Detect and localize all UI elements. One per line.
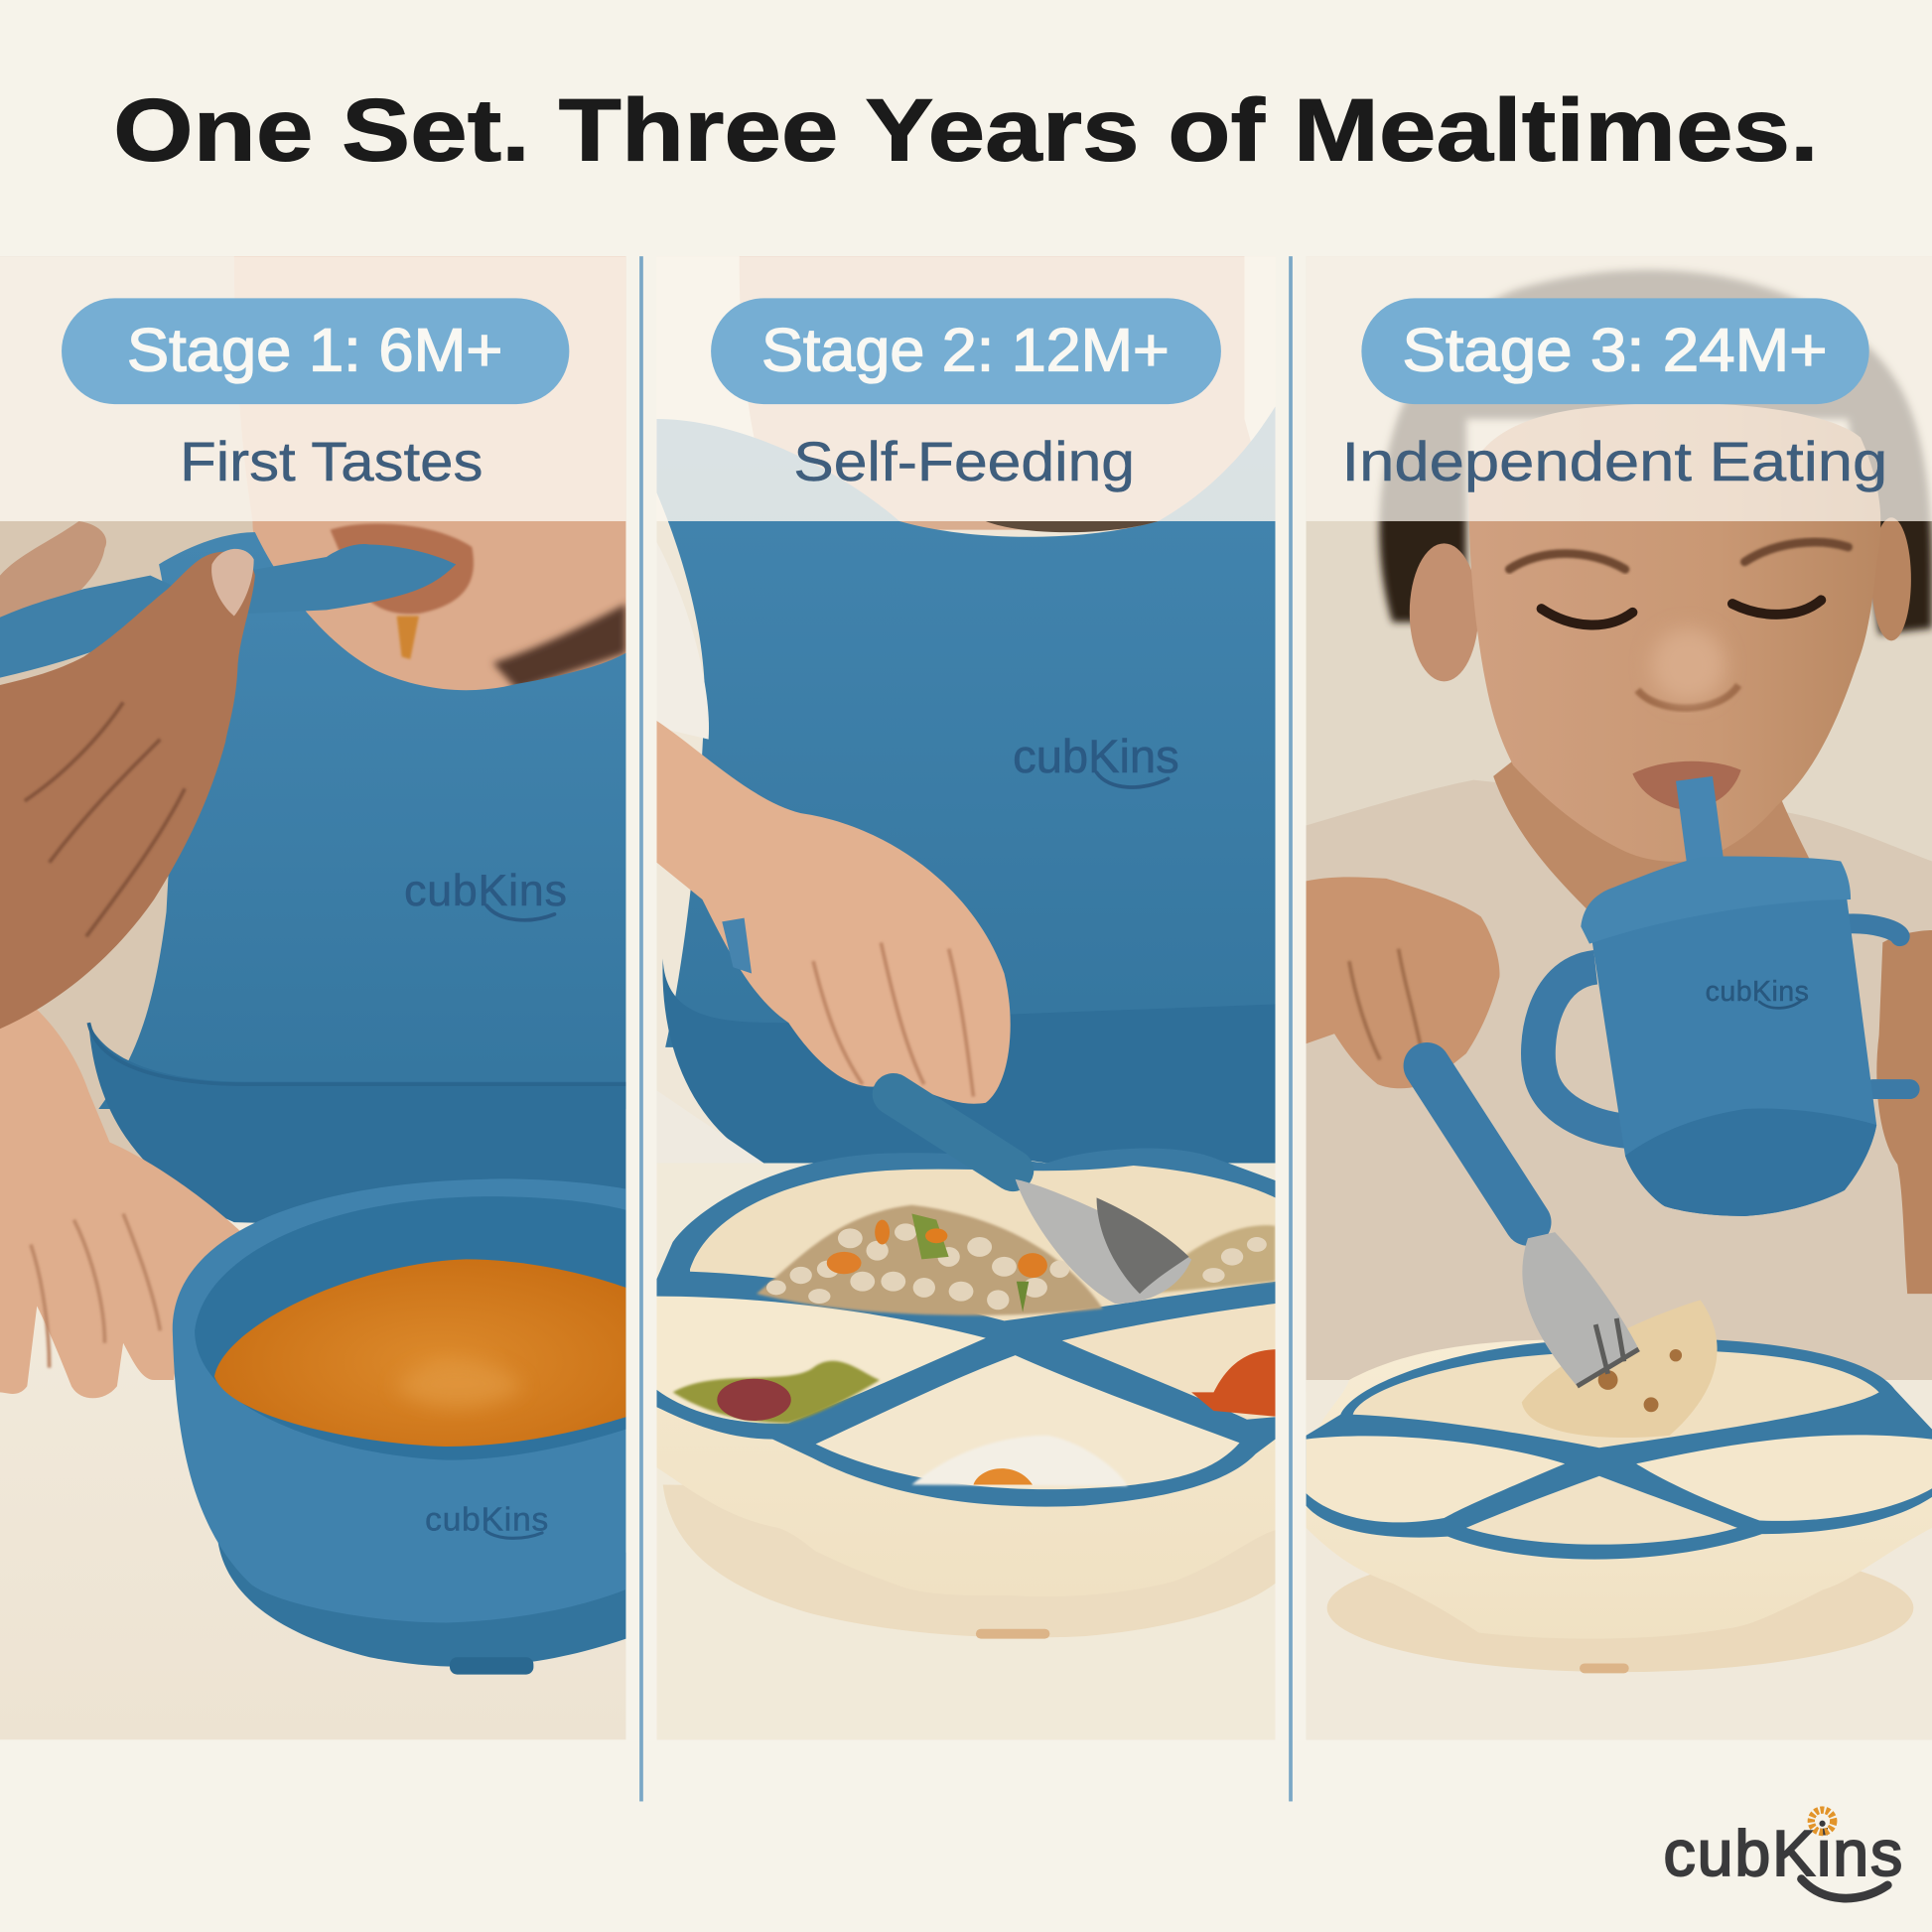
lips <box>1632 761 1741 809</box>
eyebrows <box>1509 542 1849 569</box>
fork head <box>1522 1232 1639 1386</box>
lower section food <box>911 1436 1128 1486</box>
lips and food <box>331 523 474 614</box>
stage 1 subtitle: First Tastes <box>180 430 483 492</box>
plate blue rim and dividers <box>1307 1338 1932 1560</box>
stage 2 subtitle: Self-Feeding <box>793 430 1135 492</box>
divider two <box>1289 256 1293 1801</box>
plate: right section <box>1636 1435 1932 1521</box>
barley food <box>757 1205 1276 1315</box>
adult hand <box>0 552 255 1029</box>
eyes <box>1542 600 1821 624</box>
plate body <box>1307 1339 1932 1639</box>
cup logo: cubKins <box>1706 976 1809 1008</box>
plate: left section <box>656 1297 986 1424</box>
stage 2 pill <box>711 298 1221 404</box>
baby arm and hand <box>656 721 1011 1104</box>
right hand on cup <box>1876 930 1932 1294</box>
stage 2 pill: Stage 2: 12M+ <box>761 317 1170 384</box>
cup handles <box>1538 967 1626 1131</box>
table <box>1307 1380 1932 1739</box>
translucent header band <box>0 256 625 521</box>
photo: toddler with straw cup and fork <box>1307 256 1932 1739</box>
bib logo: cubKins <box>1013 730 1179 782</box>
stage 1 pill <box>62 298 569 404</box>
translucent header band <box>656 256 1276 521</box>
stage 3 pill <box>1361 298 1869 404</box>
bowl logo: cubKins <box>425 1501 548 1538</box>
toddler hand <box>1307 877 1500 1088</box>
panel: stage 2 self-feeding <box>656 256 1282 1739</box>
panel: stage 1 first tastes <box>0 256 625 1739</box>
bib <box>98 532 625 1109</box>
roti <box>1522 1300 1718 1438</box>
translucent header band <box>1307 256 1932 521</box>
panel: stage 3 independent eating <box>1307 256 1932 1739</box>
right section tomato <box>1191 1349 1282 1417</box>
bowl suction base <box>216 1530 625 1667</box>
icon: lion cub <box>1811 1810 1834 1832</box>
spoon <box>0 544 456 678</box>
puree <box>214 1259 625 1447</box>
nose <box>1637 685 1738 708</box>
bowl interior <box>195 1196 625 1460</box>
stage 3 pill: Stage 3: 24M+ <box>1402 317 1828 384</box>
plate: top section <box>1353 1350 1879 1448</box>
table <box>763 1164 1275 1165</box>
cup lid <box>1581 857 1851 944</box>
right ear <box>1871 517 1911 640</box>
fork handle <box>1427 1066 1528 1222</box>
bib collar and body <box>656 407 1276 1047</box>
left ear <box>1410 543 1478 681</box>
suction base <box>663 1484 1276 1638</box>
baby chin <box>740 256 1276 530</box>
bib pocket <box>88 1023 625 1232</box>
photo: baby self-feeding with plate and spoon <box>656 256 1282 1739</box>
stage 1 pill: Stage 1: 6M+ <box>127 317 502 384</box>
brand logo: cubKins <box>1663 1818 1902 1889</box>
plate: lower section <box>816 1355 1240 1489</box>
suction base <box>1327 1544 1913 1672</box>
plate: lower section <box>1466 1476 1737 1545</box>
bib pocket <box>662 959 1276 1164</box>
plate body <box>657 1161 1275 1491</box>
plate: top section <box>690 1166 1276 1320</box>
spoon head <box>1016 1179 1191 1304</box>
stage 3 subtitle: Independent Eating <box>1342 430 1887 492</box>
bib logo: cubKins <box>404 867 567 915</box>
baby forearm and hand <box>0 986 242 1398</box>
neck <box>1493 690 1811 918</box>
plate blue rim and dividers <box>656 1149 1276 1507</box>
plate: left section <box>1307 1436 1565 1522</box>
fingernail <box>211 549 254 617</box>
photo: baby fed by adult with bowl <box>0 256 625 1739</box>
baby face <box>234 256 625 702</box>
divider one <box>639 256 643 1801</box>
left section food <box>673 1361 880 1423</box>
straw <box>1694 778 1706 863</box>
title: One Set. Three Years of Mealtimes. <box>113 79 1819 179</box>
cup body <box>1589 881 1876 1216</box>
spoon tail <box>722 918 752 973</box>
sleeve <box>656 542 709 740</box>
hair back <box>1379 270 1932 634</box>
plate: right section <box>1062 1304 1276 1420</box>
head <box>1468 403 1880 862</box>
shirt <box>1307 780 1932 1392</box>
bowl body <box>173 1178 625 1622</box>
spoon handle <box>894 1094 1013 1171</box>
thumb <box>0 521 107 618</box>
